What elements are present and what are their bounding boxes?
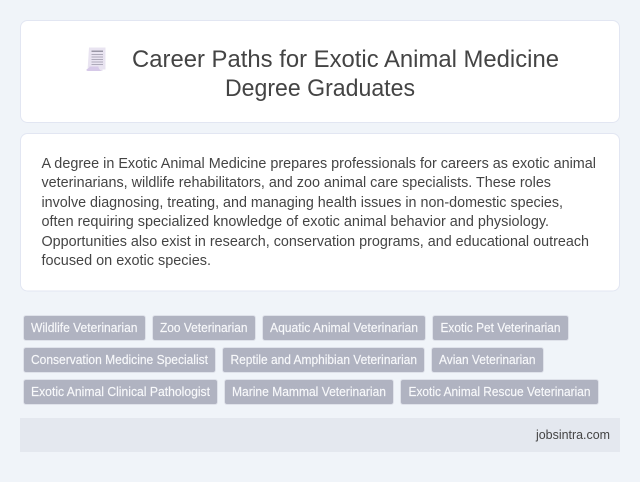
panel: header <box>20 20 620 122</box>
text block: description: focused on exotic species. <box>42 253 211 269</box>
footer bar <box>20 418 620 452</box>
tag: Aquatic Animal Veterinarian: Aquatic Animal Veterinarian <box>270 320 418 335</box>
title: Degree Graduates <box>225 75 415 102</box>
tag: Exotic Animal Clinical Pathologist <box>24 380 218 404</box>
panel: description <box>20 134 620 291</box>
tag: Reptile and Amphibian Veterinarian <box>222 348 424 372</box>
tag: Zoo Veterinarian <box>152 316 256 340</box>
tag: Wildlife Veterinarian <box>24 316 146 340</box>
text block: description: Opportunities also exist in research, conservation programs, and educational outreach <box>42 234 589 250</box>
text block: description <box>42 156 596 269</box>
tag: Exotic Animal Rescue Veterinarian <box>400 380 598 404</box>
text block: description: involve diagnosing, treating, and managing health issues in non-domestic species, <box>42 195 563 211</box>
tag: Exotic Pet Veterinarian: Exotic Pet Veterinarian <box>440 320 560 335</box>
tag: Marine Mammal Veterinarian: Marine Mammal Veterinarian <box>232 384 386 399</box>
tag list: career paths <box>24 316 598 404</box>
tag: Zoo Veterinarian: Zoo Veterinarian <box>160 320 248 335</box>
footer credit: jobsintra.com <box>535 428 610 442</box>
text block: description: veterinarians, wildlife rehabilitators, and zoo animal care specialists. These roles <box>42 175 551 191</box>
title: Career Paths for Exotic Animal Medicine <box>132 46 559 73</box>
tag: Exotic Animal Rescue Veterinarian: Exotic Animal Rescue Veterinarian <box>408 384 590 399</box>
tag: Exotic Animal Clinical Pathologist: Exotic Animal Clinical Pathologist <box>31 384 210 399</box>
title <box>132 46 559 102</box>
tag: Aquatic Animal Veterinarian <box>262 316 426 340</box>
tag: Exotic Pet Veterinarian <box>432 316 568 340</box>
tag: Conservation Medicine Specialist <box>24 348 216 372</box>
tag: Avian Veterinarian <box>432 348 544 372</box>
tag: Conservation Medicine Specialist: Conservation Medicine Specialist <box>31 352 208 367</box>
tag: Avian Veterinarian: Avian Veterinarian <box>439 352 536 367</box>
text block: description: often requiring specialized knowledge of exotic animal behavior and physiology. <box>42 214 549 230</box>
tag: Wildlife Veterinarian: Wildlife Veterinarian <box>31 320 138 335</box>
text block: description: A degree in Exotic Animal Medicine prepares professionals for careers as exotic animal <box>42 156 596 172</box>
tag: Reptile and Amphibian Veterinarian: Reptile and Amphibian Veterinarian <box>230 352 417 367</box>
icon: scroll document <box>86 48 106 71</box>
tag: Marine Mammal Veterinarian <box>224 380 394 404</box>
